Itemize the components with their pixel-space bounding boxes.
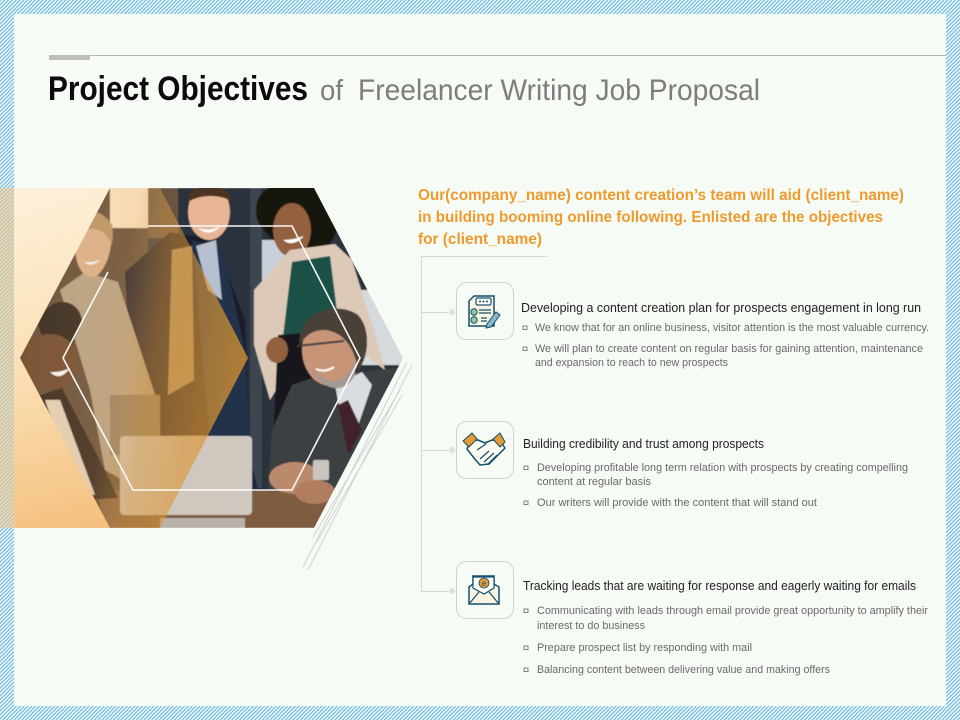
header rule — [49, 55, 946, 60]
icon: checklist with pencil — [456, 282, 514, 340]
bullets 3: Communicating with leads through email provide great opportunity to amplify their — [537, 605, 928, 617]
diagonal accent lines — [303, 362, 412, 570]
right woman — [256, 188, 336, 248]
intro paragraph: in building booming online following. Enlisted are the objectives — [418, 209, 883, 226]
title — [48, 70, 760, 108]
white hexagon outline — [63, 226, 360, 490]
icon: email envelope: e — [482, 579, 487, 588]
laptop — [120, 436, 252, 515]
objective 2 — [456, 422, 908, 509]
left cream wedges — [14, 188, 110, 528]
intro paragraph: Our(company_name) content creation’s team will aid (client_name) — [418, 187, 904, 204]
title: Project Objectives — [48, 70, 308, 108]
bullets 3: interest to do business — [537, 620, 645, 632]
bullets 2: content at regular basis — [537, 476, 651, 488]
title: of — [320, 75, 344, 107]
heading 3: Tracking leads that are waiting for response and eagerly waiting for emails — [523, 578, 916, 593]
bullets 2 — [524, 462, 908, 509]
bullets 3: Balancing content between delivering value and making offers — [537, 664, 830, 676]
front left woman — [38, 302, 82, 345]
connector tree — [422, 256, 547, 594]
seated man — [268, 368, 397, 492]
bullets 1: and expansion to reach to new prospects — [535, 357, 728, 369]
bullets 1: We will plan to create content on regular basis for gaining attention, maintenance — [535, 343, 923, 355]
team photo in hexagon — [14, 182, 404, 528]
intro paragraph: for (client_name) — [418, 231, 542, 248]
bullets 1 — [523, 322, 929, 369]
orange gradient overlay — [20, 188, 248, 528]
bullets 3: Prepare prospect list by responding with mail — [537, 642, 752, 654]
table — [100, 489, 328, 528]
title: Freelancer Writing Job Proposal — [358, 74, 760, 107]
heading 1: Developing a content creation plan for prospects engagement in long run — [521, 300, 921, 315]
bullets 2: Developing profitable long term relation with prospects by creating compelling — [537, 462, 908, 474]
photo scene — [14, 182, 404, 528]
tinted hatch strip beside photo — [0, 188, 14, 528]
icon: handshake — [456, 422, 514, 478]
bullets 1: We know that for an online business, visitor attention is the most valuable currency. — [535, 322, 929, 334]
bullets 3 — [524, 605, 928, 676]
standing man — [125, 232, 250, 450]
heading 2: Building credibility and trust among prospects — [523, 436, 764, 451]
blonde woman — [60, 272, 160, 490]
intro paragraph — [418, 187, 904, 248]
bullets 2: Our writers will provide with the content that will stand out — [537, 497, 817, 509]
objective 1 — [456, 282, 929, 369]
icon: email envelope — [456, 562, 514, 618]
objective 3 — [456, 562, 928, 676]
